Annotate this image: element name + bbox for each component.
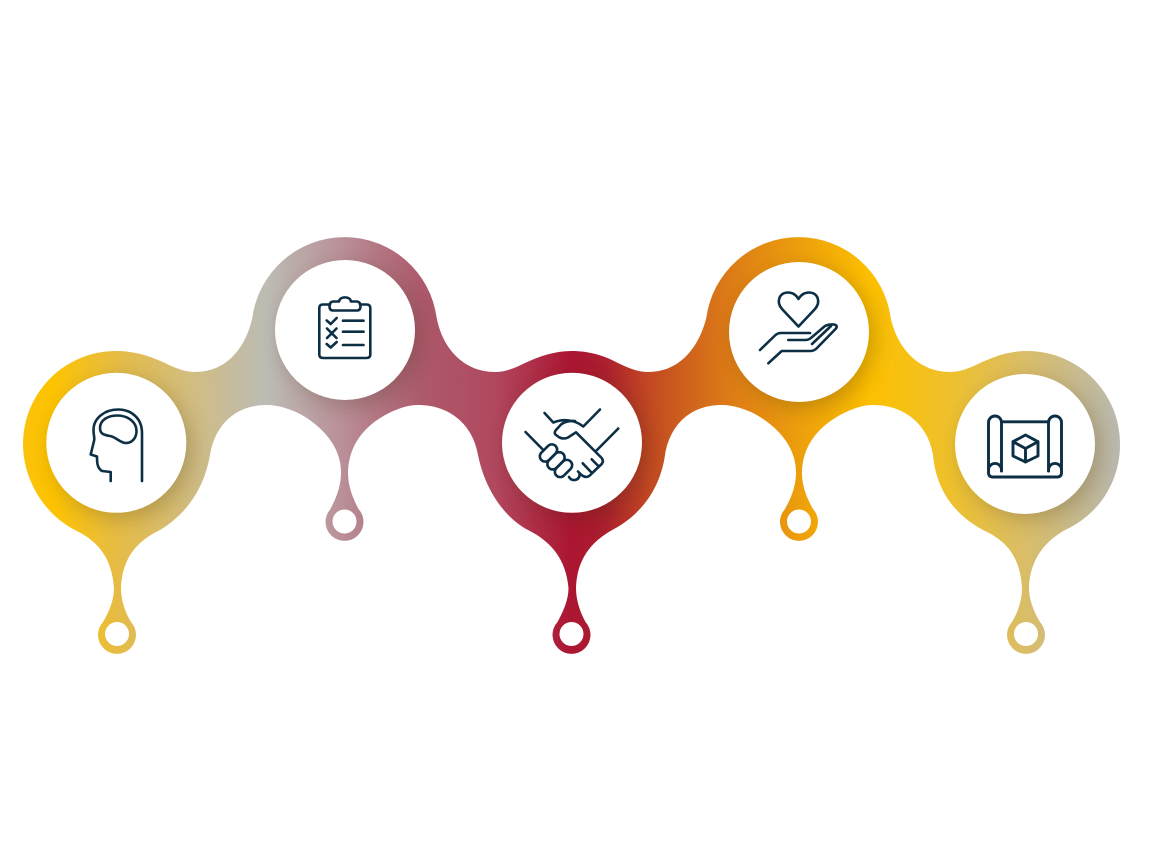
white circle 3 (502, 373, 642, 513)
step 2: checklist (275, 260, 415, 534)
white circle 5 (955, 374, 1095, 514)
icon: clipboard (319, 297, 370, 358)
icon: head with brain (91, 410, 142, 481)
icon: hand holding heart (760, 292, 837, 363)
infographic: five-step ribbon timeline (23, 237, 1120, 654)
step 1: mind (46, 373, 186, 646)
icon: handshake (526, 410, 618, 480)
circle shadows (52, 266, 1101, 520)
connected gradient ribbon (23, 237, 1120, 654)
step 4: care (729, 262, 869, 534)
ring hole 1 (105, 622, 129, 646)
ring hole 2 (332, 510, 356, 534)
white circle 1 (46, 373, 186, 513)
step 3: partnership (502, 373, 642, 646)
ring hole 4 (787, 510, 811, 534)
ring hole 3 (560, 622, 584, 646)
white circle 2 (275, 260, 415, 400)
ring hole 5 (1014, 622, 1038, 646)
icon: blueprint with cube (988, 416, 1062, 477)
white circle 4 (729, 262, 869, 402)
step 5: plan (955, 374, 1095, 646)
